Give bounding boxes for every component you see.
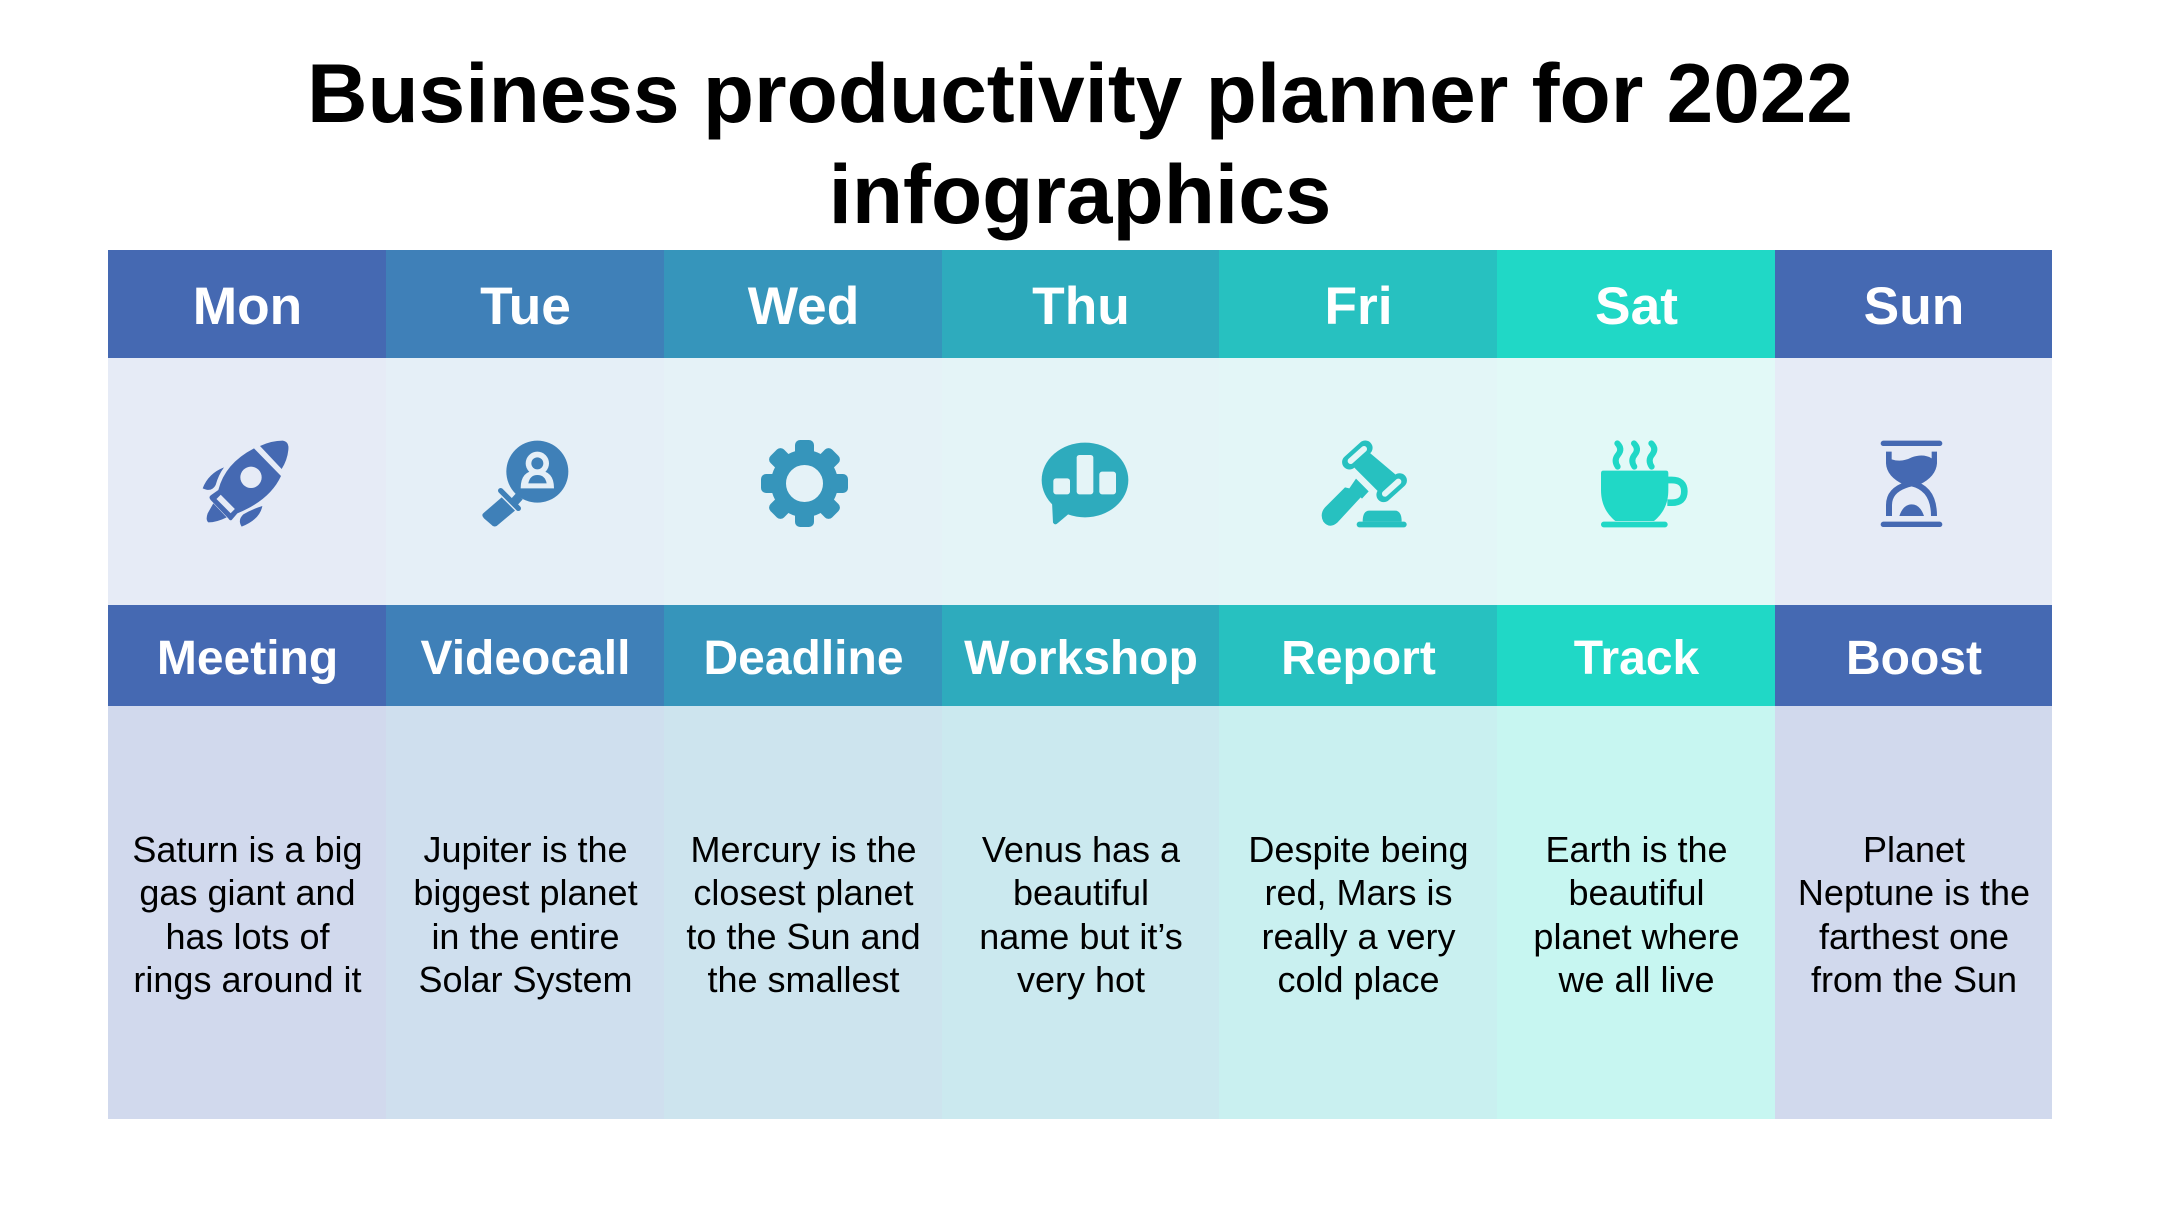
description panel: [1775, 706, 2052, 1119]
label: Meeting: Meeting: [157, 632, 338, 685]
text block: [1248, 829, 1469, 1000]
text block: [413, 829, 638, 1000]
label: Videocall: Videocall: [421, 632, 630, 685]
label: Report: [1219, 605, 1497, 706]
text block: Planet: [1863, 829, 1965, 870]
heading: Thu: Thu: [1032, 277, 1130, 336]
panel: Sunday column: [1775, 250, 2052, 1119]
text block: Saturn is a big: [132, 829, 363, 870]
heading: Sun: [1775, 250, 2052, 358]
text block: cold place: [1277, 959, 1440, 1000]
description panel: [1219, 706, 1497, 1119]
panel: Thursday column: [942, 250, 1219, 1119]
text block: to the Sun and: [686, 916, 921, 957]
text block: Mercury is the: [690, 829, 917, 870]
label: Track: Track: [1574, 632, 1699, 685]
text block: farthest one: [1819, 916, 2009, 957]
icon panel: hourglass: [1775, 358, 2052, 605]
panel: Friday column: [1219, 250, 1497, 1119]
heading: Wed: [664, 250, 942, 358]
panel: Wednesday column: [664, 250, 942, 1119]
heading: Thu: [942, 250, 1219, 358]
text block: in the entire: [431, 916, 620, 957]
text block: Neptune is the: [1798, 872, 2030, 913]
icon panel: coffee cup: [1497, 358, 1775, 605]
heading: Tue: Tue: [480, 277, 571, 336]
title: [307, 46, 1853, 241]
label: Meeting: [108, 605, 386, 706]
heading: Fri: [1219, 250, 1497, 358]
heading: Tue: [386, 250, 664, 358]
label: Workshop: Workshop: [964, 632, 1198, 685]
text block: Solar System: [418, 959, 633, 1000]
label: Track: [1497, 605, 1775, 706]
icon panel: gear: [664, 358, 942, 605]
text block: name but it’s: [979, 916, 1183, 957]
heading: Sat: [1497, 250, 1775, 358]
panel: Tuesday column: [386, 250, 664, 1119]
description panel: [386, 706, 664, 1119]
icon panel: gavel: [1219, 358, 1497, 605]
label: Deadline: [664, 605, 942, 706]
panel: Saturday column: [1497, 250, 1775, 1119]
text block: [1533, 829, 1740, 1000]
text block: biggest planet: [413, 872, 638, 913]
text block: planet where: [1533, 916, 1740, 957]
text block: red, Mars is: [1264, 872, 1453, 913]
text block: the smallest: [707, 959, 900, 1000]
text block: [1798, 829, 2030, 1000]
text block: Venus has a: [982, 829, 1180, 870]
text block: beautiful: [1568, 872, 1705, 913]
label: Workshop: [942, 605, 1219, 706]
text block: really a very: [1261, 916, 1456, 957]
text block: from the Sun: [1811, 959, 2017, 1000]
icon panel: person search: [386, 358, 664, 605]
text block: closest planet: [693, 872, 914, 913]
text block: [686, 829, 921, 1000]
panel: Monday column: [108, 250, 386, 1119]
heading: Wed: Wed: [748, 277, 859, 336]
label: Boost: Boost: [1846, 632, 1982, 685]
text block: has lots of: [165, 916, 330, 957]
title: Business productivity planner for 2022: [307, 46, 1853, 140]
title: infographics: [829, 147, 1331, 241]
text block: [979, 829, 1183, 1000]
text block: very hot: [1017, 959, 1145, 1000]
description panel: [1497, 706, 1775, 1119]
text block: gas giant and: [139, 872, 356, 913]
heading: Sun: Sun: [1864, 277, 1964, 336]
text block: [132, 829, 363, 1000]
label: Videocall: [386, 605, 664, 706]
heading: Fri: Fri: [1324, 277, 1393, 336]
description panel: [108, 706, 386, 1119]
label: Report: Report: [1281, 632, 1436, 685]
text block: Earth is the: [1545, 829, 1728, 870]
icon panel: chart speech bubble: [942, 358, 1219, 605]
heading: Sat: Sat: [1595, 277, 1678, 336]
label: Deadline: Deadline: [703, 632, 904, 685]
heading: Mon: Mon: [193, 277, 302, 336]
description panel: [664, 706, 942, 1119]
label: Boost: [1775, 605, 2052, 706]
text block: Jupiter is the: [423, 829, 628, 870]
description panel: [942, 706, 1219, 1119]
text block: rings around it: [133, 959, 362, 1000]
text block: Despite being: [1248, 829, 1469, 870]
text block: beautiful: [1013, 872, 1149, 913]
text block: we all live: [1558, 959, 1715, 1000]
heading: Mon: [108, 250, 386, 358]
icon panel: rocket: [108, 358, 386, 605]
